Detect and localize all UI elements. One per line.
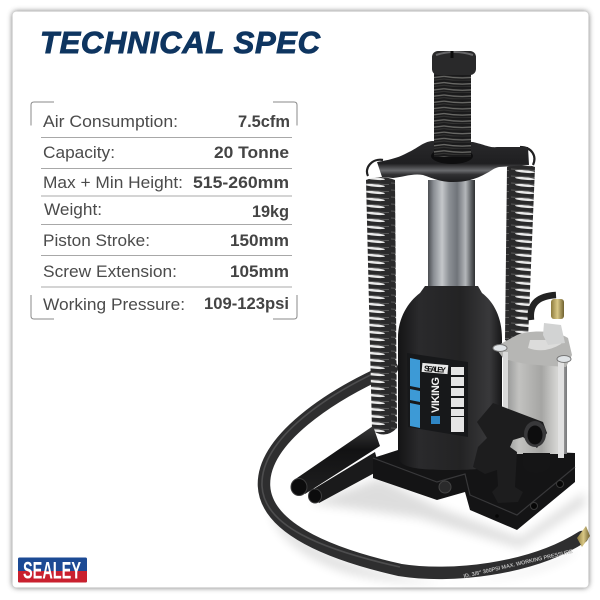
row: working pressure: Working Pressure: [43, 295, 185, 314]
table corner brackets [31, 102, 297, 319]
label icons [451, 367, 464, 432]
row: capacity: Capacity: [43, 143, 115, 162]
label brand [422, 363, 448, 374]
row: weight: Weight: [44, 200, 102, 219]
hand pump socket [473, 403, 547, 503]
soft product shadows [270, 478, 585, 583]
row: air consumption: Air Consumption: [43, 112, 178, 131]
row: air consumption: 7.5cfm [238, 112, 290, 131]
row: height [43, 173, 289, 192]
handle tubes [291, 426, 380, 503]
jack bottle body [398, 286, 502, 470]
row: height: 515-260mm [193, 173, 289, 192]
pump rear foot [523, 453, 550, 473]
row: piston stroke: Piston Stroke: [43, 231, 150, 250]
row: screw extension [43, 262, 289, 281]
base fill plug [439, 481, 451, 493]
screw cap [432, 51, 476, 75]
row: capacity [43, 143, 289, 162]
sealey logo: SEALEY [23, 558, 81, 584]
base side ports [530, 502, 538, 510]
row: screw extension: 105mm [230, 262, 289, 281]
row: working pressure: 109-123psi [204, 294, 289, 313]
upper spring hooks [367, 147, 534, 176]
pump cylinder [503, 360, 567, 454]
row: height: Max + Min Height: [43, 173, 183, 192]
pump valve block [543, 323, 565, 345]
label viking ship icon [431, 416, 440, 424]
screw thread [434, 73, 471, 161]
specification table [31, 102, 297, 319]
title: TECHNICAL SPEC [40, 25, 321, 60]
label blue panels [410, 358, 420, 428]
pump tie rods [493, 344, 571, 458]
row: weight: 19kg [252, 202, 289, 221]
hose brass coupling [577, 526, 590, 547]
pump top cap [495, 332, 572, 367]
left spring [366, 177, 397, 435]
air pump [473, 295, 572, 503]
label product name: VIKING [430, 377, 442, 413]
row: piston stroke: 150mm [230, 231, 289, 250]
row: air consumption [43, 112, 290, 131]
row: working pressure [43, 294, 289, 314]
spring top plate [377, 120, 529, 182]
row: piston stroke [43, 231, 289, 250]
air inlet hose [531, 295, 556, 320]
sealey logo [18, 558, 87, 584]
air hose [262, 365, 590, 580]
product label [407, 353, 468, 437]
bottle jack product illustration [262, 51, 590, 583]
brass fitting [551, 299, 564, 319]
row: weight [44, 200, 289, 221]
right spring [505, 164, 535, 343]
hose print: ID. 3/8" 300PSI MAX. WORKING PRESSURE [463, 549, 574, 580]
jack base [373, 450, 575, 530]
row: capacity: 20 Tonne [214, 143, 289, 162]
chrome ram [428, 180, 475, 290]
product label: SEALEY [424, 364, 447, 375]
table row dividers [41, 138, 292, 287]
row: screw extension: Screw Extension: [43, 262, 177, 281]
